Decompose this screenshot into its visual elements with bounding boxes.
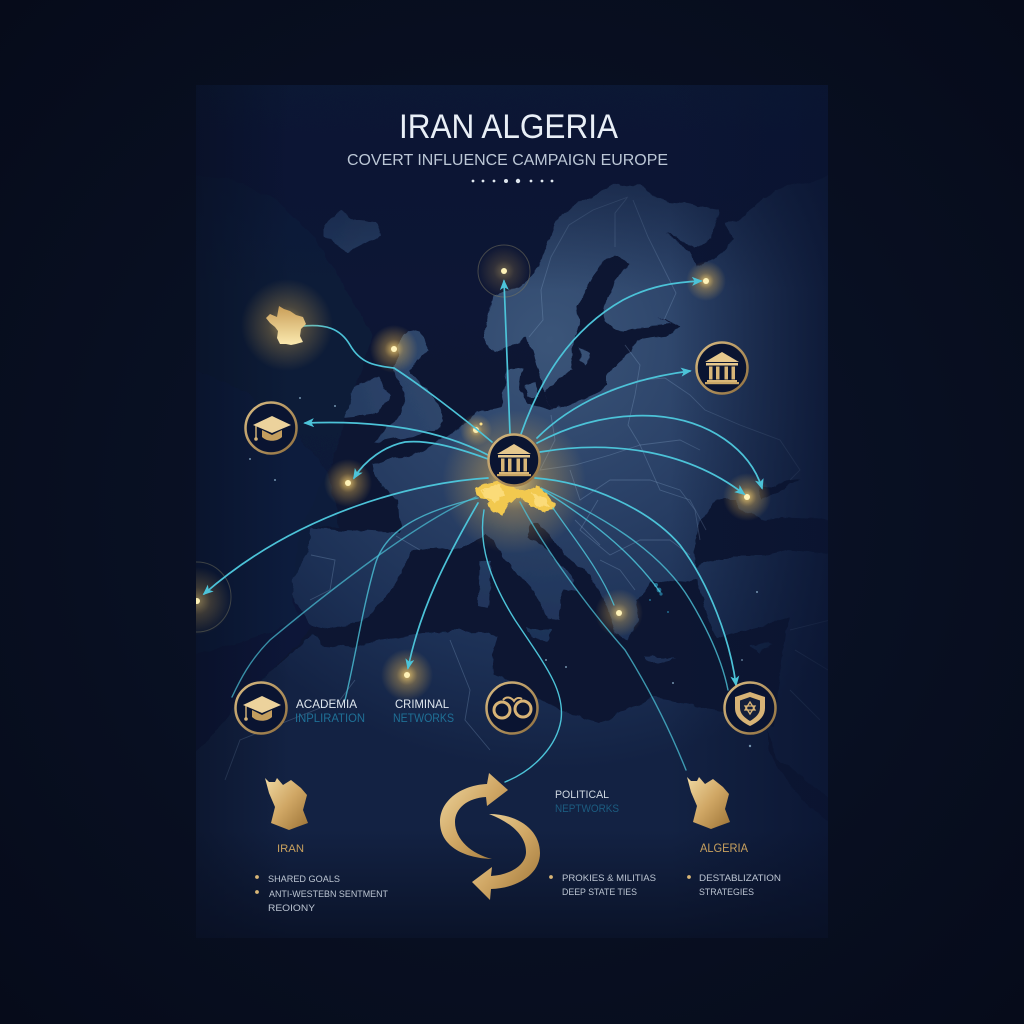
icon: academia left	[246, 402, 296, 454]
list: Iran goals	[255, 874, 388, 914]
map: Red Sea and Nile strip	[768, 732, 774, 760]
label: Algeria: ALGERIA	[700, 843, 748, 855]
icon: Algeria map	[687, 777, 730, 829]
decorative title dots	[472, 179, 553, 183]
subtitle: COVERT INFLUENCE CAMPAIGN EUROPE	[347, 152, 668, 169]
icon: central institution hub	[488, 434, 540, 486]
panel: poster with map of Europe	[196, 85, 828, 938]
list: proxies	[549, 873, 656, 898]
glowing target points	[163, 245, 771, 701]
label: political networks: POLITICAL	[555, 789, 609, 801]
label: criminal networks: CRIMINAL	[395, 699, 450, 711]
icon: handcuffs	[486, 682, 538, 734]
label: political networks: NEPTWORKS	[555, 803, 619, 815]
map: Mediterranean Sea	[313, 522, 789, 727]
map: Atlantic lighter wave bands	[266, 386, 354, 674]
poster edge fade	[324, 184, 784, 270]
network arrows	[204, 281, 762, 782]
list: Algeria strategies: DESTABLIZATION	[699, 873, 781, 884]
small star dots	[249, 397, 758, 747]
map: Atlantic and North Sea	[230, 85, 786, 674]
map: islands and peninsulas	[325, 212, 772, 662]
list: proxies: PROKIES & MILITIAS	[562, 873, 656, 884]
title: IRAN ALGERIA	[399, 108, 618, 146]
icon: shield	[724, 682, 776, 734]
list: Iran goals: SHARED GOALS	[268, 874, 340, 885]
map: Black Sea	[693, 480, 820, 568]
map: country borders	[225, 197, 830, 780]
map: Baltic Sea	[543, 255, 680, 410]
list: Iran goals: ANTI-WESTEBN SENTMENT	[269, 889, 388, 900]
label: criminal networks: NETWORKS	[393, 713, 454, 725]
label: Iran: IRAN	[277, 843, 304, 855]
list: Algeria strategies: STRATEGIES	[699, 887, 754, 898]
list: Algeria strategies	[687, 873, 781, 898]
map: glowing gold region at hub	[442, 410, 586, 554]
list: Iran goals: REOIONY	[268, 903, 316, 914]
label: academia infiltration: INPLIRATION	[295, 713, 365, 725]
icon: institution right	[696, 342, 748, 394]
icon: circular exchange arrows	[440, 773, 540, 900]
list: proxies: DEEP STATE TIES	[562, 887, 637, 898]
label: academia infiltration	[295, 699, 365, 725]
map: seas and islands	[196, 85, 820, 760]
label: academia infiltration: ACADEMIA	[296, 699, 357, 711]
icon: academia infiltration	[236, 682, 286, 734]
label: criminal networks	[393, 699, 454, 725]
icon: Iran map	[265, 778, 308, 830]
icon: glowing country map top left	[241, 279, 333, 371]
label: political networks	[555, 789, 619, 815]
Aegean speckle	[649, 583, 669, 613]
